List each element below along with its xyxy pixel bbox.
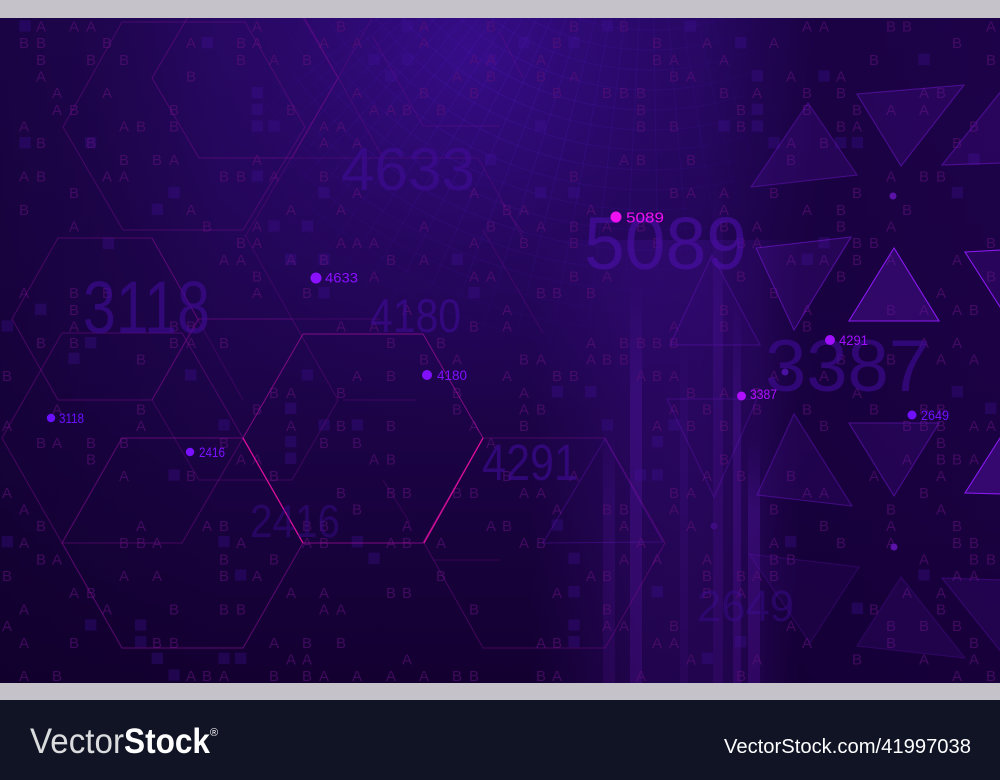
letter matrix: AAABABBB (2, 618, 962, 635)
bright hexagon edges (243, 438, 483, 543)
letter matrix: BABBABABA (269, 385, 862, 402)
letter matrix: ABBBAABBAA (119, 468, 946, 485)
triangle 10 (749, 554, 859, 643)
logo: VectorStock (30, 722, 218, 761)
data point 4291 (825, 332, 868, 348)
number 5089: 5089 (584, 202, 747, 285)
letter matrix: AAABBABABBBBBBAA (2, 418, 996, 435)
number 2649: 2649 (697, 582, 794, 631)
triangle 12 (942, 578, 1000, 653)
data point 2649 (908, 407, 949, 423)
letter matrix: BAABAABB (69, 185, 862, 202)
data point 4180 (422, 367, 467, 383)
letter matrix: BBBBABAAABAABB (36, 52, 996, 69)
number 3118: 3118 (83, 266, 210, 349)
letter matrix: BAAABABBB (252, 268, 996, 286)
data point 5089: 5089 (626, 210, 664, 226)
bottom grey band (0, 683, 1000, 700)
data point 3387 (737, 386, 777, 402)
letter matrix: AABBAABBBBAB (19, 118, 979, 136)
triangle 4 (756, 237, 851, 330)
triangle 8 (849, 423, 939, 496)
footer bar (0, 700, 1000, 780)
letter matrix: ABBAAABABAABAABABB (19, 535, 979, 552)
data point 5089 (610, 210, 664, 226)
letter matrix: AAAABABBBAABBA (36, 18, 996, 36)
triangle 1 (751, 103, 857, 187)
letter matrix: ABABBABAAA (36, 68, 846, 86)
triangle 13 (667, 399, 757, 497)
letter matrix: ABAABABABBABA (69, 218, 896, 236)
letter matrix: BAAABBABBA (86, 452, 979, 468)
letter matrix: BBAAABBB (119, 152, 796, 169)
letter matrix: ABBAABAABB (69, 318, 812, 336)
data point 4633: 4633 (325, 270, 358, 286)
letter matrix: ABBBAABBBBBBAA (52, 102, 929, 119)
data point 3118: 3118 (59, 410, 84, 426)
footer image id: VectorStock.com/41997038 (724, 736, 971, 758)
big numbers (83, 136, 930, 631)
small dots (710, 192, 898, 550)
letter matrix: ABBABBBBBA (19, 285, 946, 302)
letter matrix: ABABBABBA (19, 502, 946, 518)
letter matrix: AAAAABAA (286, 652, 979, 668)
letter matrix: BABBBBBAB (36, 435, 946, 452)
letter matrix: AAABBAAABAA (219, 252, 962, 269)
number 4633: 4633 (341, 136, 475, 203)
letter matrix: BAABABAAB (69, 302, 979, 319)
letter matrix: ABAABBABBABB (19, 168, 946, 186)
data point 2649: 2649 (921, 407, 949, 423)
letter matrix: ABBBABABBBBBB (52, 402, 946, 418)
triangle 2 (857, 85, 964, 166)
letter matrix: ABBBBBAABAAAB (2, 485, 929, 502)
letter matrix: BAABBBAABAABAB (36, 518, 962, 535)
letter matrix: BABABBABAAA (2, 368, 829, 385)
logo: VectorStock: Stock (124, 722, 210, 761)
triangle 7 (757, 414, 852, 506)
data point 3387: 3387 (750, 386, 777, 402)
data point 2416 (186, 444, 225, 460)
number 4180: 4180 (370, 289, 461, 342)
hexagon: bottom left (62, 438, 303, 648)
triangle 5 (849, 248, 939, 321)
data point 4291: 4291 (839, 332, 868, 348)
letter matrix: BAABABABBBABAA (2, 568, 979, 585)
triangle 6 (965, 250, 1000, 310)
faint connecting lines (152, 18, 543, 560)
hexagon: small center (152, 319, 338, 480)
top grey band (0, 0, 1000, 18)
triangle 15 (543, 439, 663, 543)
triangle 3 (942, 90, 1000, 165)
letter matrix: AAABBBBBBBABBAB (52, 85, 946, 102)
vertical light streaks (603, 175, 760, 683)
letter matrix: BBBABAAAABBAAB (19, 35, 962, 52)
hexagon: bright center (243, 334, 483, 543)
hexagon network (2, 0, 665, 648)
data point 3118 (47, 410, 84, 426)
letter matrix: BBBABBBABBBBAA (36, 335, 962, 352)
data point 4633 (310, 270, 358, 286)
logo: VectorStock: Vector (30, 722, 124, 761)
letter matrix: BAAAAABBBBABBB (236, 235, 996, 252)
letter matrix: BABBAAABBABB (36, 552, 996, 568)
hexagon: lower right (424, 438, 665, 648)
data point 2416: 2416 (199, 444, 225, 460)
hexagon: upper left large (63, 22, 305, 230)
letter matrix: ABBBABBABAAABB (19, 635, 979, 652)
triangle 9 (965, 435, 1000, 494)
data point 4180: 4180 (437, 367, 467, 383)
hexagon: middle row left (2, 333, 243, 543)
number 3387: 3387 (765, 326, 930, 407)
perspective grid (267, 18, 752, 334)
logo: VectorStock: ® (210, 727, 218, 739)
number 4291: 4291 (482, 434, 578, 491)
hexagon: 3118 (12, 238, 198, 400)
letter matrix: AABBBAABBBB (19, 602, 946, 618)
letter matrix: ABAABBABAAA (69, 585, 946, 602)
hexagon: upper inner (152, 18, 338, 158)
letter matrix: BBABAABBBBAA (136, 352, 979, 368)
triangles (543, 85, 1000, 658)
letter matrix: BAAABAAAABB (19, 202, 912, 219)
letter matrix: BBAAABB (36, 135, 962, 152)
number 2416: 2416 (250, 495, 340, 547)
triangle 14 (670, 255, 760, 345)
letter matrix: ABABABBAAAABBBAABAB (19, 668, 996, 685)
triangle 11 (857, 577, 965, 658)
